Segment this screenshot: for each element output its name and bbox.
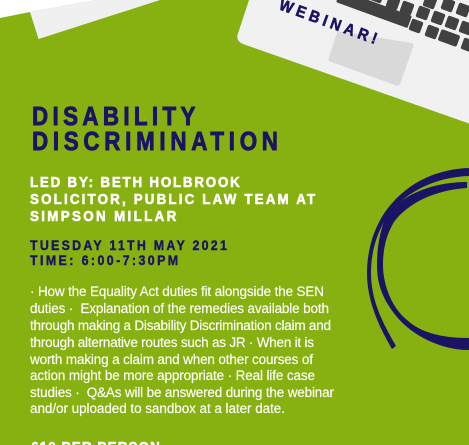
trackpad	[328, 31, 414, 86]
description: through alternative routes such as JR · When it is	[30, 335, 314, 350]
description: · How the Equality Act duties fit alongside the SEN	[30, 284, 324, 299]
description: and/or uploaded to sandbox at a later date.	[30, 401, 285, 416]
laptop body	[237, 0, 469, 124]
laptop	[237, 0, 469, 124]
title: DISABILITY	[32, 102, 195, 131]
description: worth making a claim and when other courses of	[29, 352, 313, 367]
description: duties · Explanation of the remedies available both	[30, 301, 329, 316]
paper sheet	[30, 0, 160, 39]
title	[32, 102, 278, 156]
presenter details	[30, 173, 316, 224]
description: studies · Q&As will be answered during the webinar	[30, 385, 334, 400]
keyboard	[336, 0, 469, 53]
date and time: TUESDAY 11TH MAY 2021	[30, 238, 227, 253]
circular swoosh	[367, 168, 469, 350]
inner arc	[377, 182, 469, 350]
date and time	[30, 238, 227, 268]
presenter details: SOLICITOR, PUBLIC LAW TEAM AT	[30, 190, 316, 207]
title: DISCRIMINATION	[32, 127, 278, 156]
outer arc	[367, 168, 469, 349]
description: action might be more appropriate · Real life case	[30, 368, 315, 383]
date and time: TIME: 6:00-7:30PM	[30, 253, 178, 268]
presenter details: SIMPSON MILLAR	[30, 207, 176, 224]
presenter details: LED BY: BETH HOLBROOK	[30, 173, 240, 190]
description	[29, 284, 334, 416]
description: through making a Disability Discrimination claim and	[30, 318, 331, 333]
